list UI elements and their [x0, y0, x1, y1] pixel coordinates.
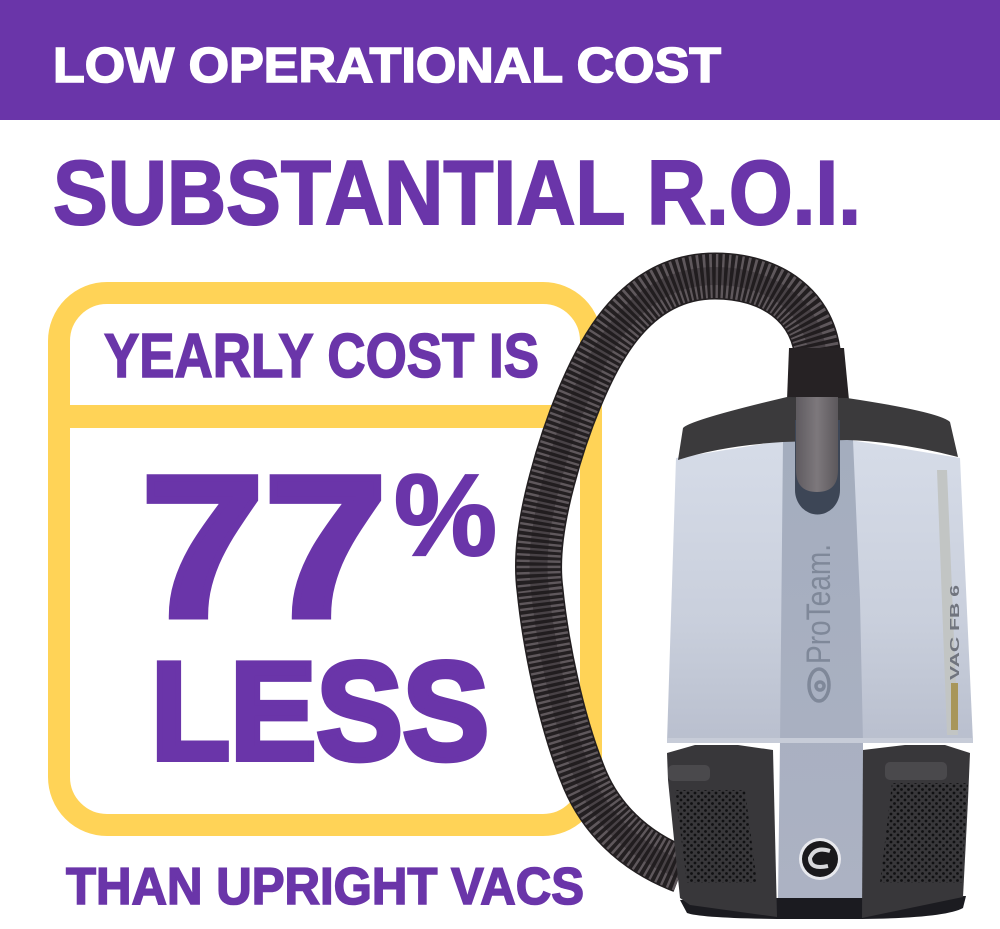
main heading: SUBSTANTIAL R.O.I.	[53, 143, 861, 244]
body seam	[667, 738, 973, 743]
less label: LESS	[151, 634, 489, 789]
side panel stripe	[937, 470, 958, 735]
centre panel	[778, 440, 863, 900]
right foot latch	[885, 762, 947, 780]
left foot latch	[668, 765, 710, 781]
header band	[0, 0, 1000, 120]
left foot	[667, 745, 777, 917]
big number: 77	[141, 434, 387, 659]
left grille	[675, 790, 757, 883]
hose neck	[787, 348, 849, 400]
vacuum hose	[538, 276, 818, 870]
vacuum body	[667, 348, 973, 919]
logo badge	[799, 838, 841, 880]
brand mark	[809, 669, 829, 701]
panel: yearly cost callout	[59, 293, 591, 825]
header title: LOW OPERATIONAL COST	[53, 39, 721, 93]
top cap	[678, 397, 958, 460]
handle slot	[795, 420, 840, 515]
right grille	[880, 783, 968, 883]
base	[680, 896, 966, 919]
body shell	[667, 440, 973, 742]
right foot	[862, 745, 970, 918]
brand name: ProTeam.	[800, 544, 838, 664]
gold badge	[951, 683, 958, 730]
callout label: YEARLY COST IS	[104, 322, 539, 391]
model label: VAC FB 6	[947, 585, 962, 680]
comparison caption: THAN UPRIGHT VACS	[66, 858, 584, 916]
percent sign: %	[394, 450, 497, 580]
belt clip	[796, 397, 838, 492]
